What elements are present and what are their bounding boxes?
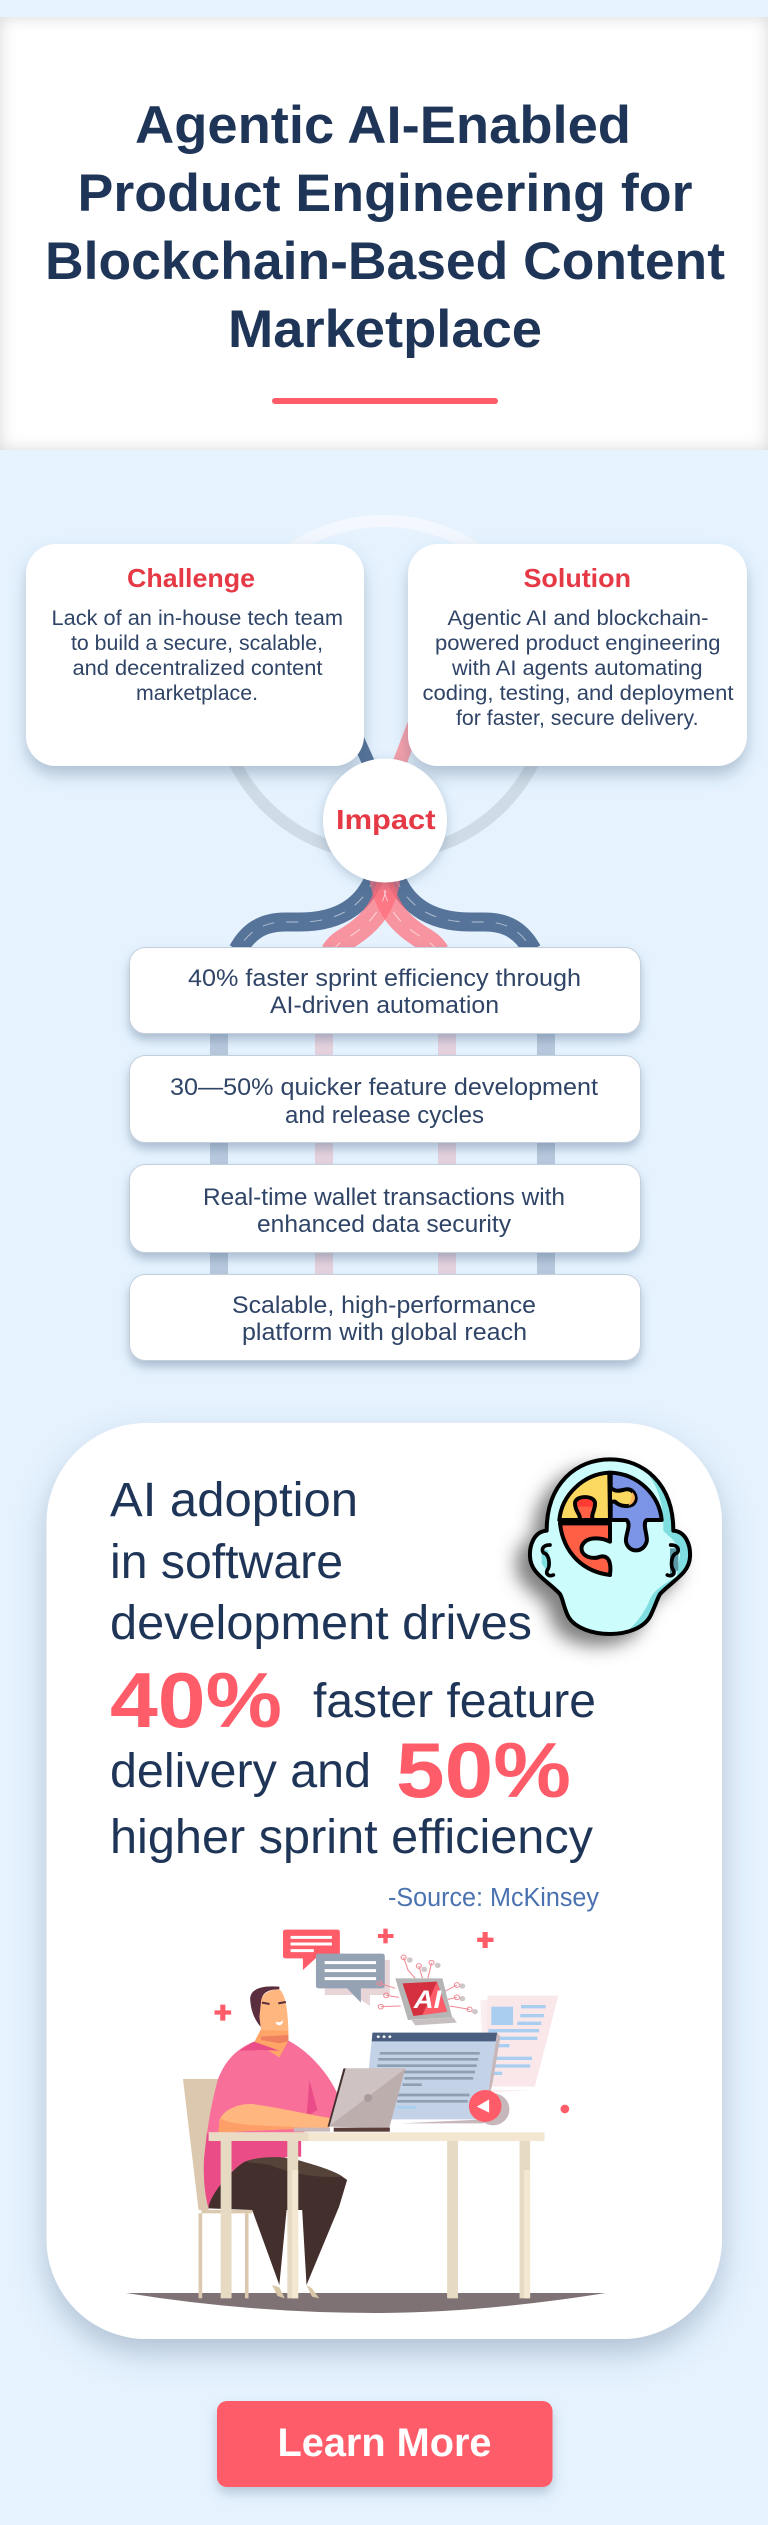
title: Marketplace [228, 300, 542, 359]
header panel [0, 17, 768, 450]
number: 50%: 50% [396, 1726, 571, 1814]
challenge text: marketplace. [136, 681, 258, 705]
chair [183, 2079, 252, 2298]
title underline [272, 398, 498, 404]
result row 4: Scalable, high-performance [232, 1292, 536, 1319]
title: Product Engineering for [78, 164, 692, 223]
challenge text: and decentralized content [72, 656, 323, 680]
solution text [422, 606, 734, 730]
title: Blockchain-Based Content [45, 232, 725, 291]
icon: plus marks and dot [214, 1929, 569, 2113]
statistic text: development drives [110, 1597, 532, 1650]
button: learn more: Learn More [278, 2421, 492, 2465]
statistic text: faster feature [313, 1675, 596, 1728]
statistic text: delivery and [110, 1745, 371, 1798]
icon: play button [469, 2090, 509, 2125]
statistic text: higher sprint efficiency [110, 1811, 593, 1864]
panel: challenge [26, 544, 364, 766]
icon: AI chip: AI [413, 1985, 442, 2014]
result row 3: enhanced data security [257, 1211, 511, 1238]
impact badge: Impact [336, 804, 436, 835]
solution text: coding, testing, and deployment [422, 681, 734, 705]
roads from impact to results [238, 876, 532, 952]
heading: solution: Solution [524, 563, 631, 593]
desk [209, 2132, 545, 2298]
strand: challenge to impact [356, 735, 374, 775]
solution text: Agentic AI and blockchain- [448, 606, 708, 630]
icon: AI chip [377, 1955, 478, 2025]
result row 3: Real-time wallet transactions with [203, 1184, 565, 1211]
panel: statistic [46, 1423, 722, 2339]
result row 4: platform with global reach [242, 1319, 527, 1346]
heading: challenge: Challenge [127, 563, 255, 593]
solution text: powered product engineering [435, 631, 720, 655]
challenge text: to build a secure, scalable, [71, 631, 323, 655]
ring connecting challenge and solution [217, 521, 551, 855]
floor shadow [126, 2293, 606, 2313]
road strips between result rows [210, 1030, 555, 1280]
result row 1: AI-driven automation [270, 992, 499, 1019]
person [204, 1986, 347, 2298]
statistic text: AI adoption [110, 1474, 358, 1527]
solution text: with AI agents automating [451, 656, 702, 680]
statistic text: in software [110, 1536, 343, 1589]
icon: document behind window [480, 1996, 558, 2093]
solution text: for faster, secure delivery. [456, 706, 698, 730]
illustration: person at desk with AI [126, 1929, 606, 2313]
challenge text: Lack of an in-house tech team [52, 606, 343, 630]
icon: head with puzzle brain [530, 1459, 690, 1634]
number: 40%: 40% [110, 1656, 282, 1744]
result row 2: and release cycles [285, 1102, 484, 1129]
panel: solution [408, 544, 747, 766]
result row 2: 30—50% quicker feature development [170, 1074, 598, 1101]
source: -Source: McKinsey [388, 1884, 599, 1912]
statistic text [110, 1474, 596, 1864]
title [45, 96, 725, 359]
result row 3 [130, 1164, 640, 1252]
icon: grey chat bubble [316, 1954, 390, 2006]
icon: browser window [364, 2033, 500, 2123]
laptop [294, 2068, 405, 2132]
result row 1: 40% faster sprint efficiency through [188, 965, 581, 992]
result row 2 [130, 1056, 640, 1142]
button: learn more [217, 2401, 552, 2487]
result row 1 [130, 948, 640, 1034]
icon: red chat bubble [283, 1930, 340, 1970]
strand: solution to impact [395, 725, 414, 775]
result row 4 [130, 1274, 640, 1360]
impact badge [323, 758, 447, 882]
challenge text [52, 606, 343, 705]
title: Agentic AI-Enabled [135, 96, 631, 155]
